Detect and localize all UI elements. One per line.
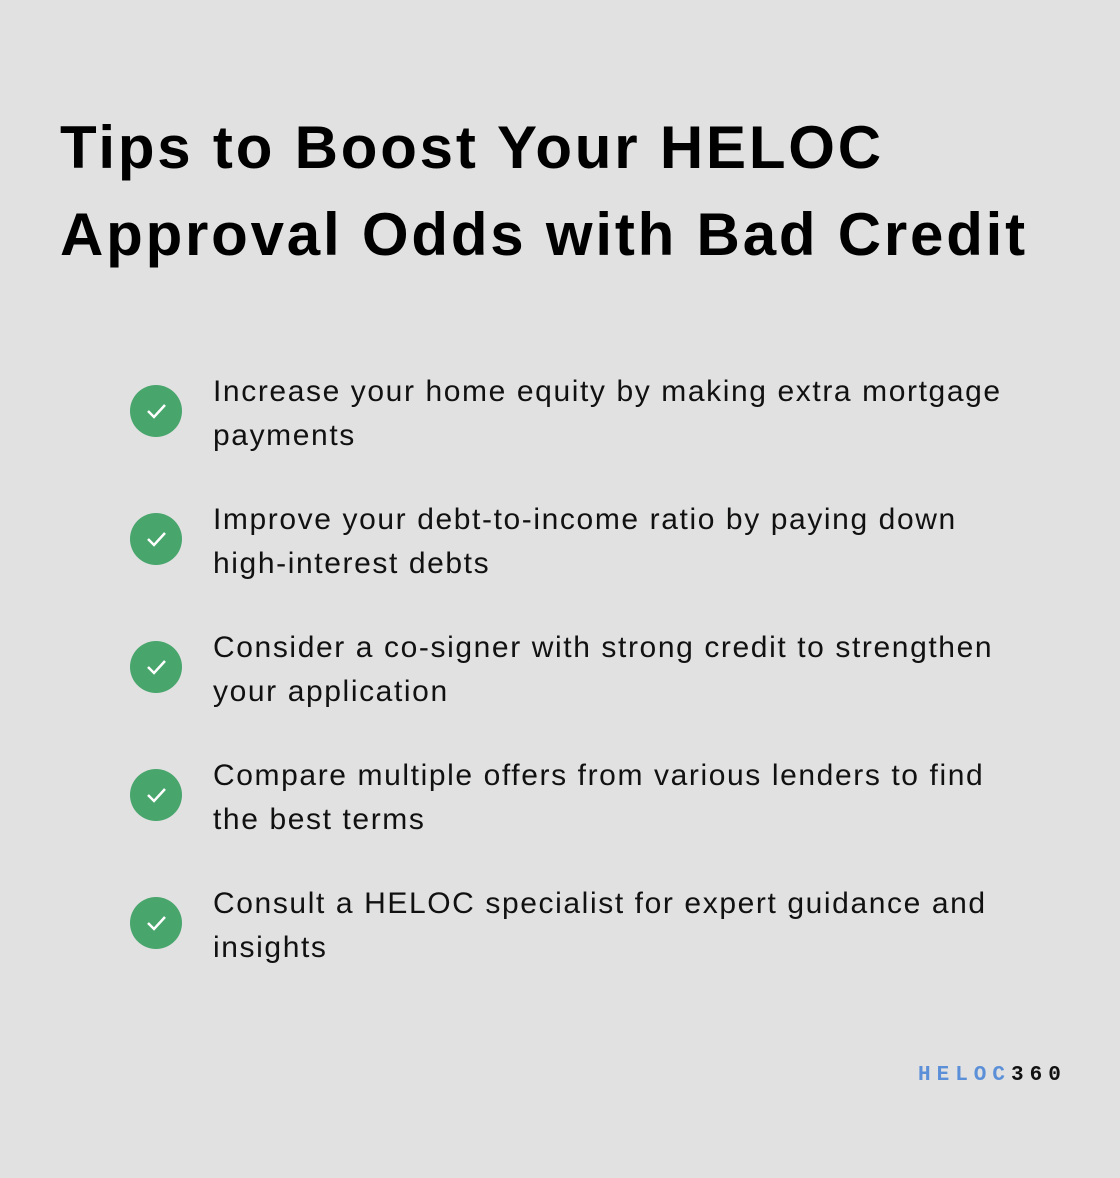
item 4 (130, 759, 984, 836)
text 1: payments (213, 419, 356, 452)
text 2: high-interest debts (213, 547, 490, 580)
text 5: Consult a HELOC specialist for expert guidance and (213, 887, 987, 920)
icon: check (130, 385, 182, 437)
item 5 (130, 887, 987, 964)
text 4 (213, 759, 984, 836)
title (60, 114, 1028, 268)
logo: HELOC360 (918, 1064, 1067, 1087)
text 3: Consider a co-signer with strong credit to strengthen (213, 631, 993, 664)
item 2 (130, 503, 957, 580)
text 1: Increase your home equity by making extra mortgage (213, 375, 1002, 408)
text 5: insights (213, 931, 328, 964)
text 1 (213, 375, 1002, 452)
text 3: your application (213, 675, 449, 708)
item 1 (130, 375, 1002, 452)
text 2 (213, 503, 957, 580)
item 3 (130, 631, 993, 708)
text 4: Compare multiple offers from various lenders to find (213, 759, 984, 792)
icon: check (130, 769, 182, 821)
title: Approval Odds with Bad Credit (60, 201, 1028, 268)
icon: check (130, 897, 182, 949)
icon: check (130, 641, 182, 693)
text 2: Improve your debt-to-income ratio by paying down (213, 503, 957, 536)
title: Tips to Boost Your HELOC (60, 114, 884, 181)
text 4: the best terms (213, 803, 425, 836)
text 5 (213, 887, 987, 964)
text 3 (213, 631, 993, 708)
icon: check (130, 513, 182, 565)
